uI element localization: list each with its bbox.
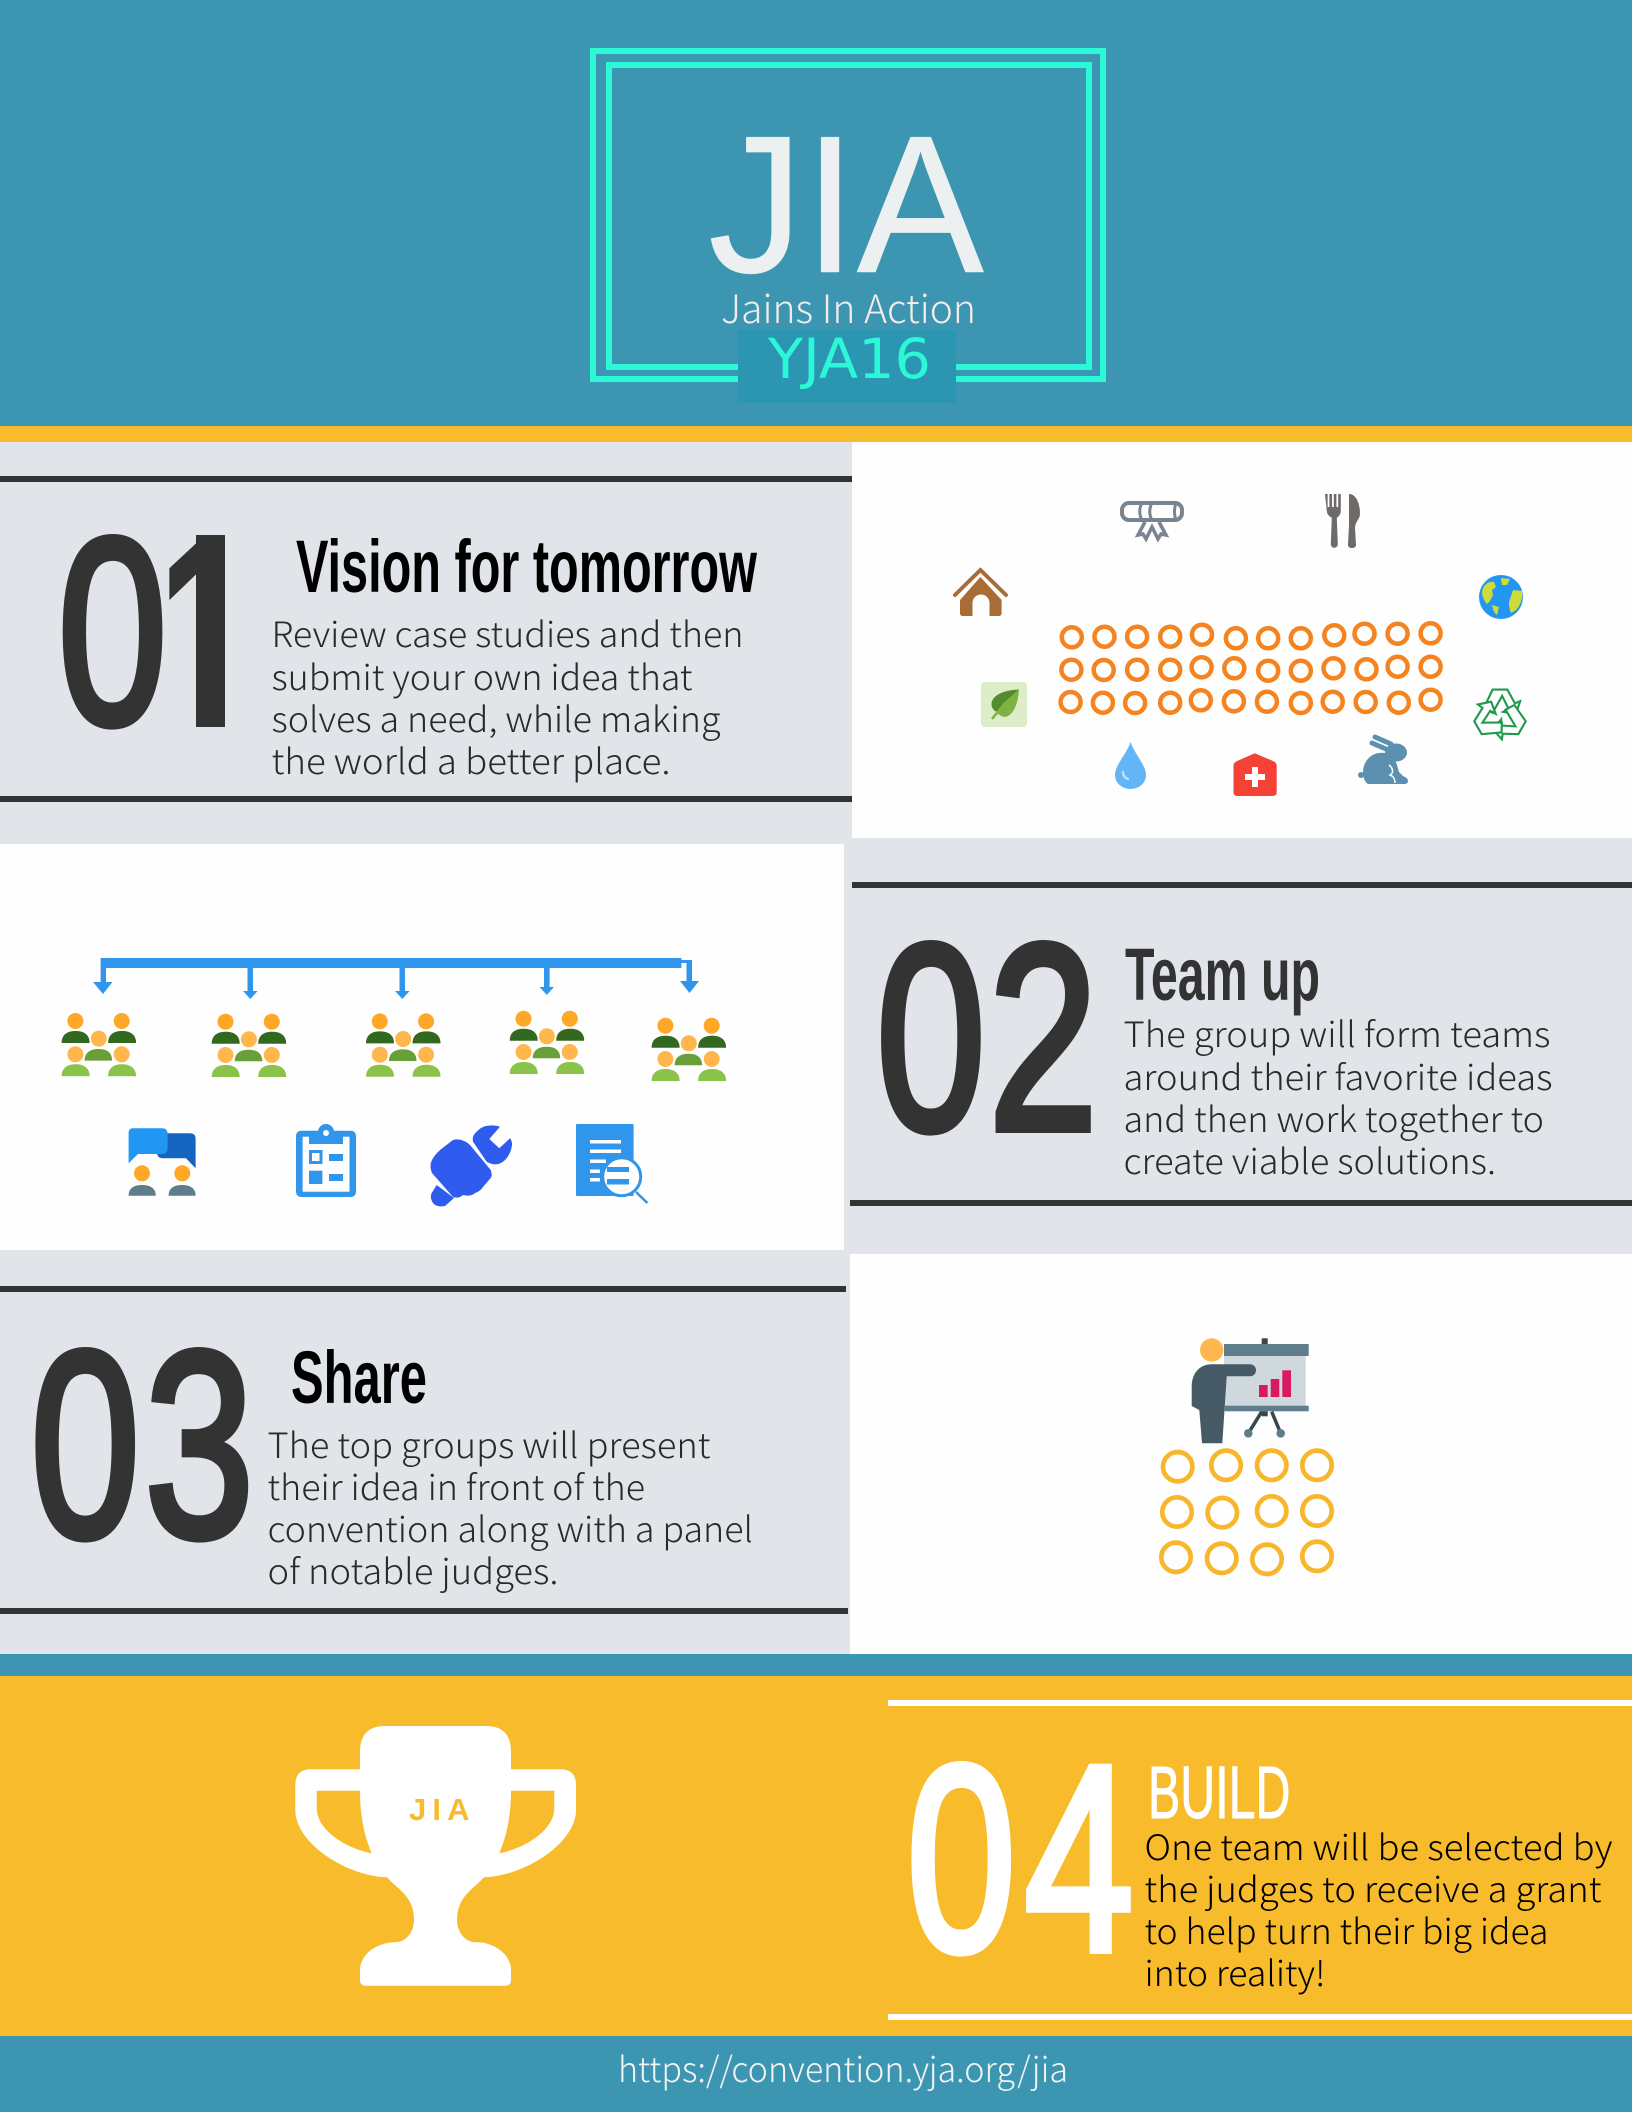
heading: Team up: Team up <box>1125 933 1320 1016</box>
footer URL: https://convention.yja.org/jia <box>618 2042 1068 2093</box>
icon: trophy: JIA <box>409 1792 470 1827</box>
body text 02: and then work together to <box>1124 1092 1544 1143</box>
body text 01: submit your own idea that <box>272 650 692 701</box>
icon: trophy <box>295 1726 576 1986</box>
icon: hand holding wrench <box>430 1125 512 1206</box>
body text 03 <box>268 1418 753 1595</box>
body text 04: to help turn their big idea <box>1144 1904 1548 1955</box>
icon: water drop <box>1115 742 1146 789</box>
panel: needs icons <box>852 442 1632 838</box>
icon: presenter at screen <box>1192 1338 1309 1443</box>
heading: BUILD: BUILD <box>1148 1751 1290 1834</box>
body text 04 <box>1144 1820 1612 1997</box>
body text 01 <box>272 607 744 785</box>
body text 01: solves a need, while making <box>272 692 720 743</box>
number 02: 02 <box>876 890 1098 1186</box>
team group 5 <box>652 1018 726 1081</box>
number 04: 04 <box>907 1711 1134 2007</box>
icon: rabbit <box>1358 737 1408 784</box>
panel: step 03 text <box>0 1250 850 1654</box>
body text 03: The top groups will present <box>268 1418 710 1469</box>
number 03: 03 <box>31 1297 254 1593</box>
subtitle: Jains In Action <box>721 279 976 335</box>
panel: teams illustration <box>0 844 844 1250</box>
icon: fork and knife <box>1325 494 1360 548</box>
YJA16 tag <box>738 327 956 403</box>
icon: scroll diploma <box>1122 503 1182 539</box>
audience rings <box>1161 1451 1332 1574</box>
orange crowd rings <box>1061 623 1441 713</box>
double frame <box>593 51 1103 379</box>
icon: leaf <box>981 682 1027 727</box>
body text 04: into reality! <box>1144 1946 1326 1997</box>
body text 02: The group will form teams <box>1124 1007 1550 1058</box>
body text 04: One team will be selected by <box>1144 1820 1612 1871</box>
icon: clipboard <box>296 1124 356 1197</box>
YJA16 tag: YJA16 <box>767 327 931 391</box>
panel: step 01 text <box>0 442 852 844</box>
arrow tree <box>93 958 699 999</box>
icon: house <box>955 570 1006 616</box>
body text 01: the world a better place. <box>272 734 670 785</box>
body text 03: of notable judges. <box>268 1544 558 1595</box>
icon: medical cross <box>1234 753 1277 796</box>
team group 4 <box>510 1011 584 1074</box>
team group 2 <box>212 1014 286 1077</box>
body text 03: convention along with a panel <box>268 1502 753 1553</box>
teal divider band <box>0 1654 1632 1676</box>
heading: Vision for tomorrow: Vision for tomorrow <box>296 525 757 608</box>
panel: step 02 text <box>845 838 1632 1254</box>
body text 04: the judges to receive a grant <box>1144 1862 1602 1913</box>
body text 02: around their favorite ideas <box>1124 1050 1552 1101</box>
panel: presentation illustration <box>850 1254 1632 1654</box>
icon: people discussing <box>129 1128 196 1196</box>
body text 01: Review case studies and then <box>272 607 744 658</box>
icon: recycle <box>1468 690 1530 745</box>
heading: Share: Share <box>291 1336 427 1419</box>
icon: document search <box>576 1124 647 1203</box>
panel: step 04 <box>0 1676 1632 2036</box>
title JIA: JIA <box>708 95 984 314</box>
team group 1 <box>62 1013 136 1076</box>
body text 02 <box>1124 1007 1552 1185</box>
team group 3 <box>366 1013 440 1077</box>
number 01: 01 <box>58 484 263 780</box>
orange divider band <box>0 426 1632 442</box>
body text 03: their idea in front of the <box>268 1460 645 1511</box>
body text 02: create viable solutions. <box>1124 1134 1496 1185</box>
footer band <box>0 2036 1632 2112</box>
icon: globe <box>1479 575 1523 619</box>
header banner <box>0 0 1632 426</box>
